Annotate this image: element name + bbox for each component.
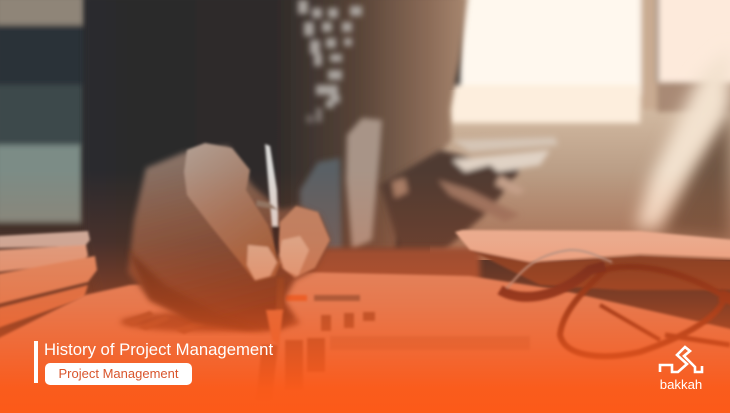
desk shadow band behind hand (290, 248, 480, 282)
hand (128, 146, 330, 330)
fingers (184, 143, 330, 281)
bright window (450, 0, 730, 123)
back of hand shading (128, 250, 268, 332)
title: History of Project Management (44, 340, 273, 359)
icon: bakkah mark (658, 345, 704, 374)
logo: bakkah (658, 345, 704, 392)
phone hand (380, 137, 558, 250)
desk shadow under hand (120, 312, 300, 332)
category tag: Project Management (59, 366, 178, 381)
checked shirt (298, 0, 362, 123)
laptop base (455, 230, 730, 290)
title accent bar (34, 341, 38, 383)
left shelf (0, 0, 86, 234)
suited body (84, 0, 468, 300)
paper chart marks (124, 295, 530, 400)
orange gradient overlay (0, 170, 730, 413)
right wall (430, 90, 730, 260)
category tag (45, 363, 192, 385)
laptop screen (660, 90, 730, 240)
desk (0, 272, 730, 413)
books at left (0, 231, 97, 328)
blue jeans and shirt fold (300, 118, 382, 250)
eyeglasses (500, 250, 730, 356)
pen (256, 144, 284, 346)
brand name: bakkah (660, 377, 702, 392)
